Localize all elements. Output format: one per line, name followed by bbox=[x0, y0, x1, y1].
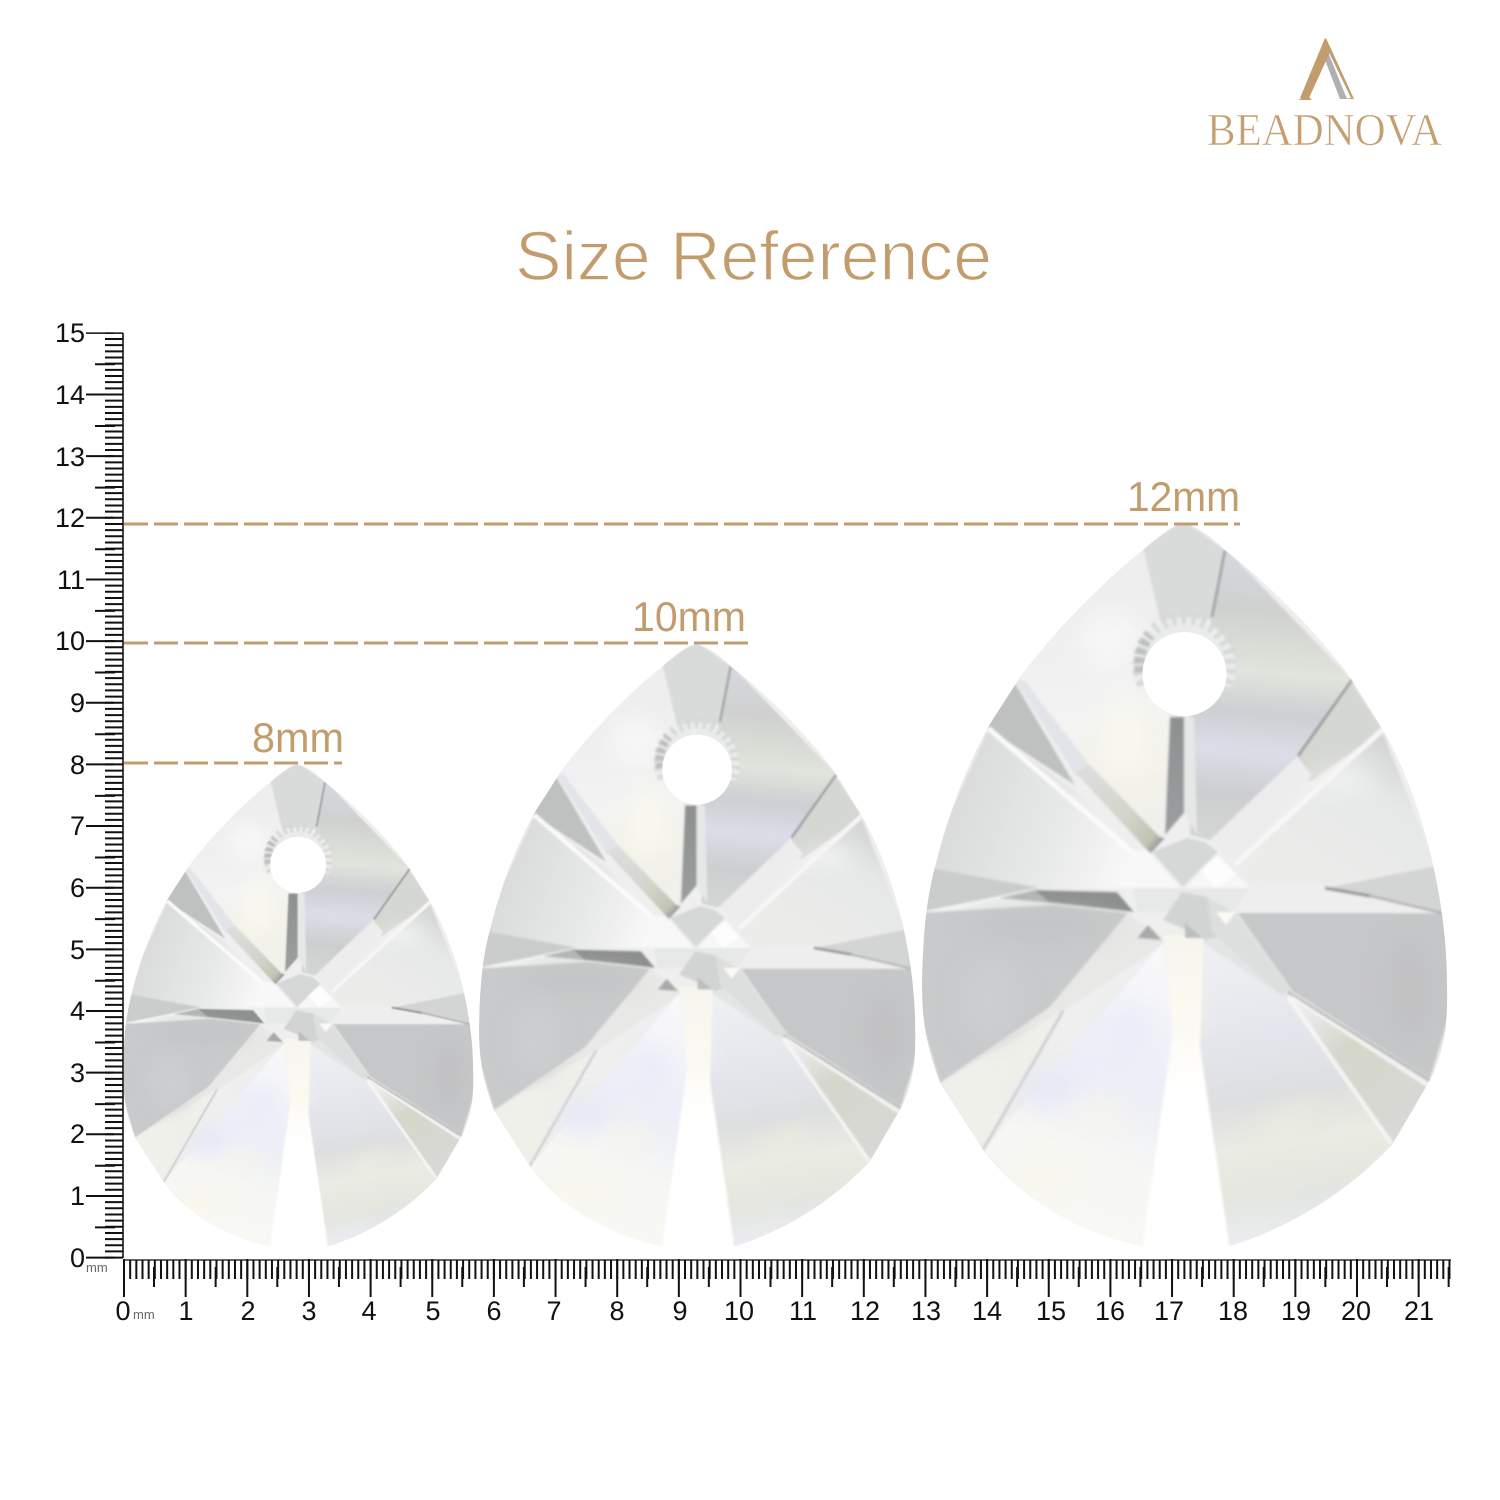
horizontal ruler labels: 6 bbox=[486, 1296, 502, 1326]
vertical ruler labels: 8 bbox=[70, 750, 85, 780]
horizontal ruler labels: 11 bbox=[789, 1296, 817, 1326]
horizontal ruler labels: 5 bbox=[425, 1296, 441, 1326]
vertical ruler labels: 15 bbox=[55, 318, 85, 348]
vertical ruler labels: 7 bbox=[70, 811, 85, 841]
vertical ruler labels: 3 bbox=[70, 1058, 85, 1088]
icon: logo triangle bbox=[1298, 38, 1354, 100]
vertical ruler labels: 10 bbox=[55, 626, 85, 656]
vertical ruler labels: 4 bbox=[70, 996, 85, 1026]
vertical ruler labels: 0 bbox=[70, 1243, 85, 1273]
horizontal ruler labels: 12 bbox=[850, 1296, 880, 1326]
horizontal ruler labels: 20 bbox=[1341, 1296, 1371, 1326]
horizontal ruler labels: 0 bbox=[115, 1296, 131, 1326]
vertical ruler labels bbox=[55, 318, 85, 1273]
horizontal ruler labels: 16 bbox=[1095, 1296, 1125, 1326]
logo wordmark: BEADNOVA bbox=[1207, 104, 1442, 155]
horizontal ruler labels: 10 bbox=[724, 1296, 754, 1326]
horizontal ruler labels: 4 bbox=[361, 1296, 377, 1326]
horizontal ruler labels: 17 bbox=[1154, 1296, 1184, 1326]
pendant: 12mm bbox=[915, 515, 1455, 1255]
horizontal ruler labels: 13 bbox=[911, 1296, 941, 1326]
10mm size marker: 10mm bbox=[632, 593, 746, 640]
horizontal ruler labels: 14 bbox=[972, 1296, 1002, 1326]
horizontal ruler labels: 7 bbox=[546, 1296, 562, 1326]
horizontal unit: mm bbox=[133, 1307, 155, 1322]
horizontal ruler labels: 3 bbox=[301, 1296, 317, 1326]
logo: BEADNOVA bbox=[1207, 38, 1442, 155]
8mm size marker: 8mm bbox=[252, 714, 344, 761]
horizontal ruler labels: 15 bbox=[1036, 1296, 1066, 1326]
pendant: 10mm bbox=[473, 637, 922, 1254]
title: Size Reference bbox=[515, 217, 992, 295]
horizontal ruler labels: 2 bbox=[240, 1296, 256, 1326]
horizontal ruler labels: 1 bbox=[178, 1296, 194, 1326]
vertical ruler labels: 13 bbox=[55, 442, 85, 472]
horizontal ruler labels: 9 bbox=[672, 1296, 688, 1326]
horizontal ruler labels: 19 bbox=[1281, 1296, 1311, 1326]
vertical ruler labels: 11 bbox=[57, 565, 85, 595]
12mm size marker: 12mm bbox=[1127, 473, 1240, 520]
horizontal ruler labels: 21 bbox=[1404, 1296, 1434, 1326]
vertical unit: mm bbox=[86, 1260, 108, 1275]
vertical ruler labels: 5 bbox=[70, 935, 85, 965]
vertical ruler labels: 12 bbox=[55, 503, 85, 533]
pendant: 8mm bbox=[118, 759, 479, 1252]
infographic canvas bbox=[57, 38, 1451, 1320]
vertical ruler labels: 14 bbox=[55, 380, 85, 410]
vertical ruler bbox=[55, 318, 123, 1275]
vertical ruler labels: 2 bbox=[70, 1119, 85, 1149]
vertical ruler labels: 9 bbox=[70, 688, 85, 718]
horizontal ruler bbox=[115, 1260, 1451, 1326]
vertical ruler labels: 6 bbox=[70, 873, 85, 903]
horizontal ruler labels bbox=[115, 1296, 1434, 1326]
horizontal ruler labels: 18 bbox=[1218, 1296, 1248, 1326]
horizontal ruler labels: 8 bbox=[609, 1296, 625, 1326]
vertical ruler labels: 1 bbox=[70, 1181, 85, 1211]
